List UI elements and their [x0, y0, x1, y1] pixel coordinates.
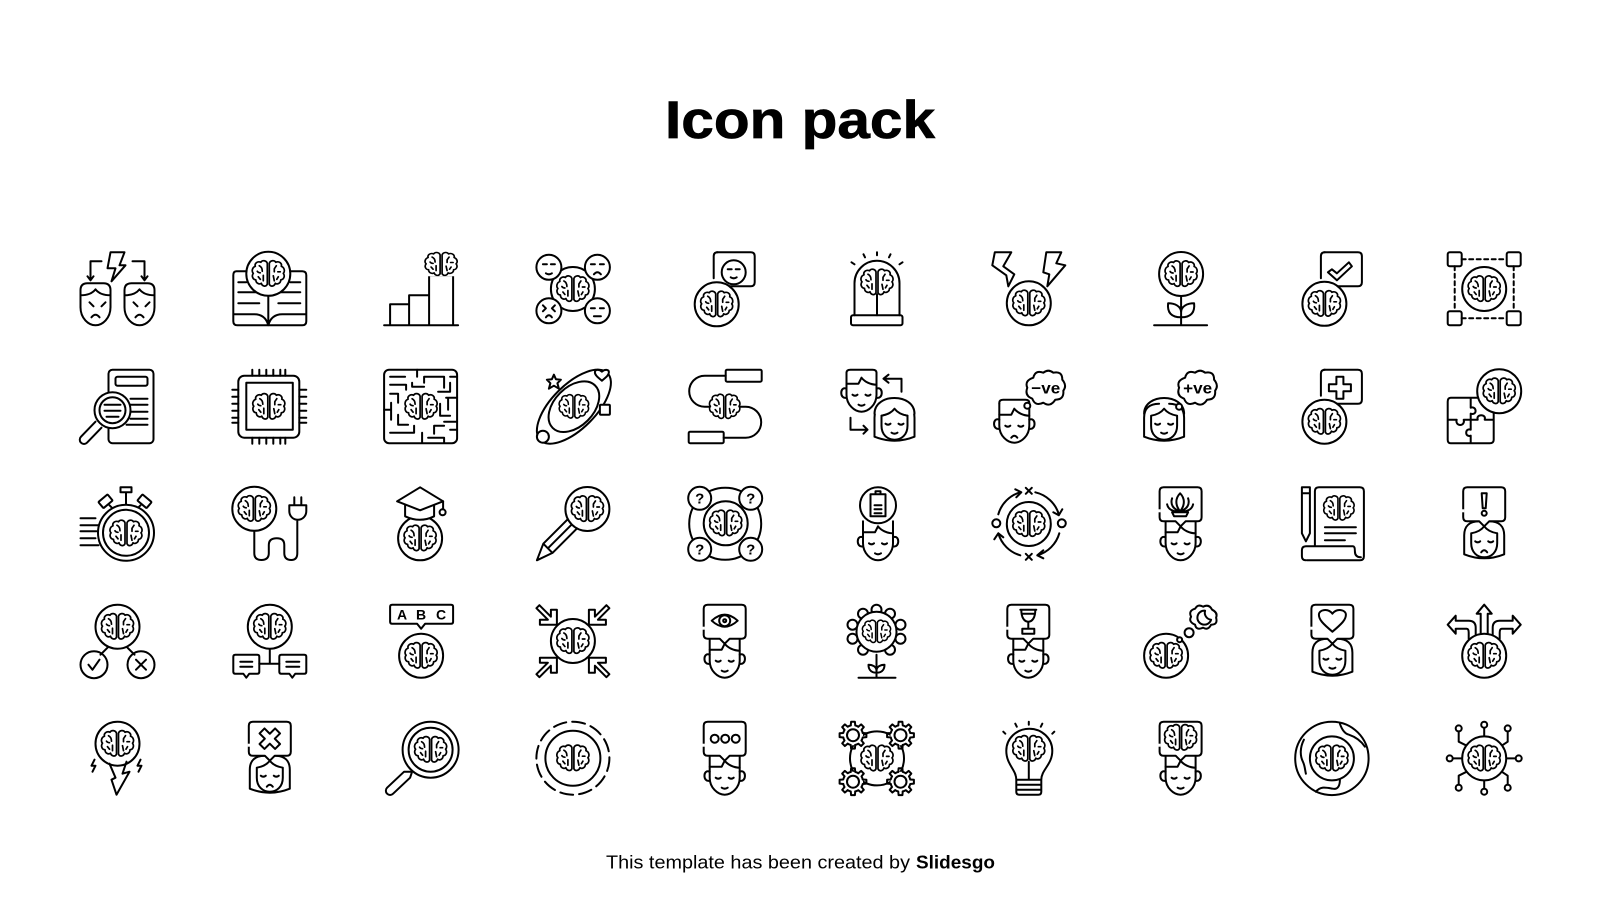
icon: brain dreaming of moon: [1144, 606, 1217, 678]
icon: man with battery circle: [858, 487, 898, 560]
icon: brain with ABC banner: B: [416, 607, 426, 623]
footer credit: This template has been created by: [606, 852, 910, 872]
icon: brain with question marks: ?: [746, 490, 755, 507]
icon: man with negative thought cloud: [994, 371, 1065, 443]
icon: brain with question marks: ?: [695, 490, 704, 507]
icon: brain with inward arrows: [536, 605, 609, 677]
icon: brain sunflower: [848, 605, 906, 678]
icon: bar chart topped by brain: [384, 252, 458, 325]
icon: brain with face speech bubble: [695, 252, 755, 326]
icon: brain on microchip: [232, 370, 306, 444]
icon: brain in glass dome: [851, 252, 902, 325]
icon: man with lotus bubble: [1160, 487, 1202, 560]
icon: brain with question marks: ?: [695, 541, 704, 558]
icon: man with eye bubble: [704, 605, 746, 678]
icon: brain with ABC banner: C: [436, 607, 446, 623]
icon: brain on pencil: [537, 487, 609, 560]
icon: brain with ABC banner: [390, 605, 453, 678]
icon: brain in selection frame: [1448, 252, 1521, 325]
icon: brain flower: [1154, 252, 1207, 325]
icon: woman with positive thought cloud: [1144, 371, 1217, 441]
title: Icon pack: [665, 91, 936, 150]
icon: woman with heart bubble: [1311, 605, 1353, 676]
icon: brain on connecting cable: [689, 370, 762, 443]
icon: brain with ABC banner: A: [397, 607, 407, 623]
icon: brain under magnifying glass: [386, 722, 459, 795]
icon: brain with graduation cap: [397, 487, 446, 560]
icon: woman with exclamation bubble: [1463, 487, 1505, 558]
icon: brain with cycle arrows: [992, 488, 1066, 560]
icon: man with brain bubble: [1160, 722, 1202, 795]
footer credit: Slidesgo: [916, 852, 995, 872]
icon: brain with lightning: [92, 722, 142, 795]
icon: brain in maze: [384, 370, 457, 443]
icon: brain over open book: [233, 252, 306, 325]
icon: brain with plus bubble: [1302, 370, 1362, 444]
icon: man with negative thought cloud: −ve: [1031, 381, 1060, 398]
icon: brain with question marks: [688, 487, 762, 561]
icon: brain decision check or cross: [80, 605, 154, 678]
icon: brain with power plug: [232, 487, 306, 560]
icon: man with cup bubble: [1007, 605, 1049, 678]
icon grid: [80, 252, 1522, 795]
icon: two angry faces with lightning: [80, 252, 154, 325]
icon: brain with four mood faces: [536, 255, 610, 323]
icon: woman with cross bubble: [249, 722, 291, 793]
icon: brain with three direction arrows: [1448, 605, 1521, 678]
icon: man with dots bubble: [704, 722, 746, 795]
icon: brain in orbit: [525, 358, 623, 456]
icon: brain network nodes: [1447, 722, 1522, 795]
icon: brain with two lightning bolts: [992, 252, 1065, 325]
icon: man and woman swapping: [841, 370, 914, 441]
icon: brain stopwatch: [80, 487, 154, 561]
icon: magnifier over document: [80, 370, 154, 444]
icon: brain lightbulb: [1003, 722, 1054, 795]
icon: brain with two speech bubbles: [233, 605, 306, 678]
icon: brain with question marks: ?: [746, 541, 755, 558]
icon: brain with checkmark bubble: [1302, 252, 1362, 326]
icon: brain in dashed ring: [536, 722, 609, 795]
icon: woman with positive thought cloud: +ve: [1183, 381, 1212, 398]
icon: brain document with pencil: [1302, 487, 1364, 560]
icon: brain with four gears: [840, 722, 914, 795]
icon: brain in globe: [1295, 722, 1369, 795]
icon: brain with puzzle pieces: [1448, 369, 1521, 443]
